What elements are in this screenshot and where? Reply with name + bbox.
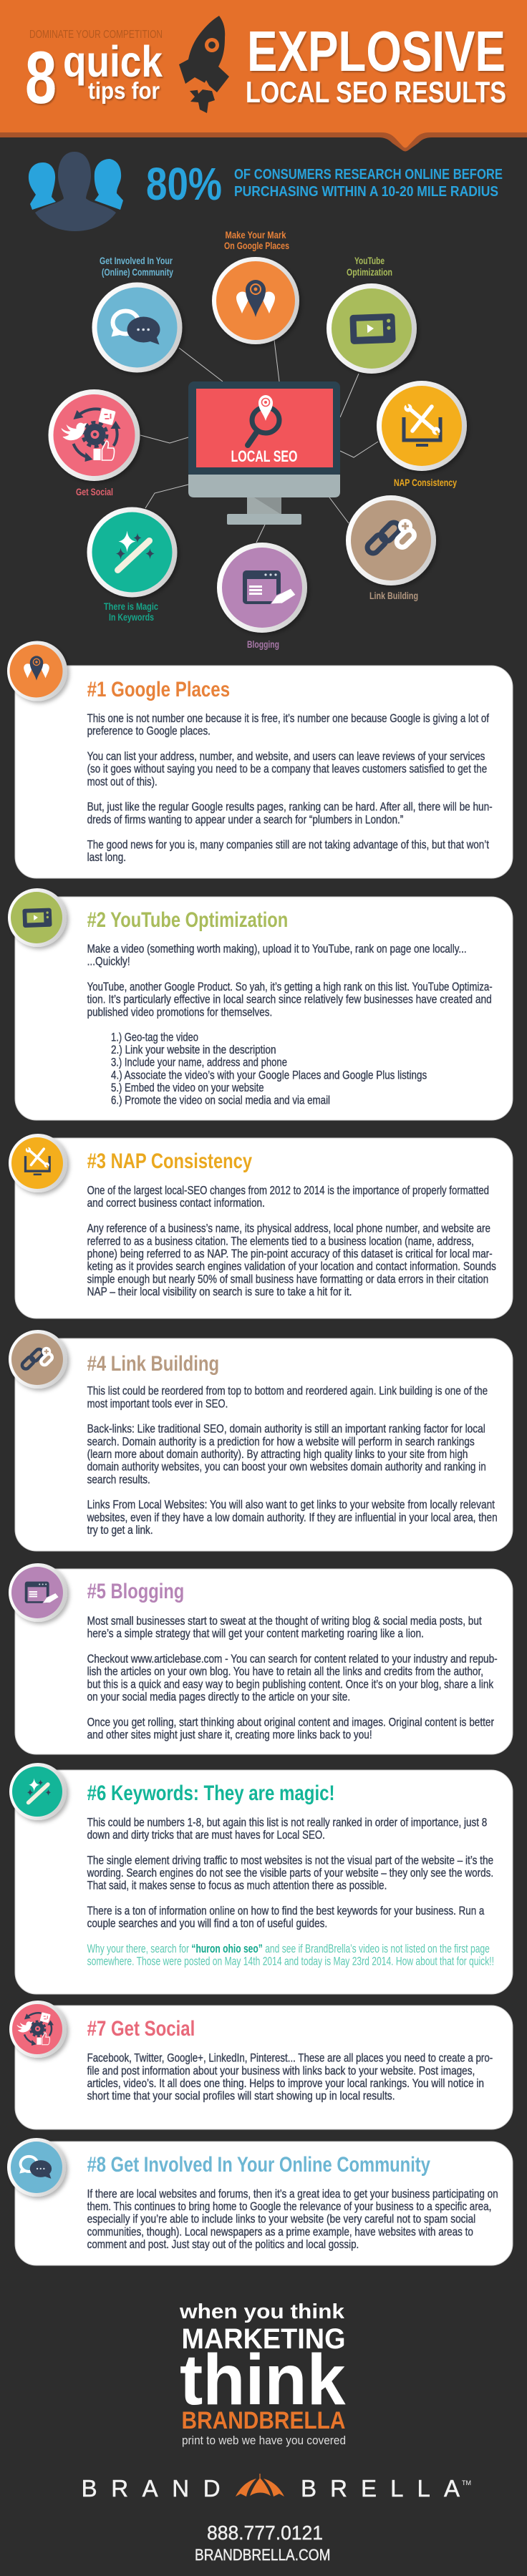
body text xyxy=(87,1385,498,1537)
circle labels: Get Involved In Your xyxy=(100,255,173,266)
body text xyxy=(87,1816,493,1930)
contact details: BRANDBRELLA.COM xyxy=(195,2546,331,2564)
icon: chain badge xyxy=(9,1330,67,1389)
body text xyxy=(87,943,493,1107)
footer slogan: BRANDBRELLA xyxy=(182,2407,345,2434)
icon: blog badge xyxy=(9,1563,67,1622)
footer slogan xyxy=(179,2300,346,2447)
body text: couple searches and you will find a ton of useful guides. xyxy=(87,1918,327,1930)
body text: most important tools ever in SEO. xyxy=(87,1397,228,1410)
panel: #2 YouTube Optimization xyxy=(8,888,513,1120)
header banner xyxy=(0,0,527,152)
headline left xyxy=(25,37,163,120)
circle: blogging xyxy=(217,543,307,633)
panel: #5 Blogging xyxy=(9,1563,513,1754)
callout xyxy=(87,1943,494,1968)
circle labels: YouTube xyxy=(354,255,385,266)
circle: NAP xyxy=(377,381,467,471)
headline left: quick xyxy=(63,37,163,86)
connector lines xyxy=(140,340,378,543)
icon: social badge xyxy=(9,2001,67,2058)
contact details xyxy=(195,2522,331,2564)
circle labels: In Keywords xyxy=(109,611,154,623)
body text: published video promotions for themselves. xyxy=(87,1006,272,1019)
icon: places badge xyxy=(7,641,67,701)
heading: #2 YouTube Optimization xyxy=(87,908,288,932)
footer slogan: MARKETING xyxy=(182,2323,345,2355)
body text xyxy=(87,2187,498,2251)
body text: on your social media pages directly to the article on your site. xyxy=(87,1691,350,1703)
panel: #4 Link Building xyxy=(9,1330,513,1551)
body text: and other sites might just share it, creating more links back to you! xyxy=(87,1729,372,1741)
icon: magnifier pin xyxy=(248,395,279,445)
body text: here’s a simple strategy that will get your content marketing roaring like a lion. xyxy=(87,1628,424,1641)
circle: social xyxy=(49,389,140,481)
body text: 3.) Include your name, address and phone xyxy=(111,1056,287,1069)
footer slogan: when you think xyxy=(179,2300,345,2323)
brand logo: TM xyxy=(462,2479,471,2487)
body text: comment and post. Just stay out of the politics and local gossip. xyxy=(87,2238,359,2251)
brand logo: BRAND xyxy=(82,2475,221,2502)
circle: link building xyxy=(346,495,436,585)
heading: #7 Get Social xyxy=(87,2017,195,2041)
body text: try to get a link. xyxy=(87,1524,153,1537)
body text: and correct business contact information. xyxy=(87,1197,265,1210)
circle labels: Optimization xyxy=(347,266,392,278)
footer slogan: print to web we have you covered xyxy=(182,2434,346,2447)
circle labels: Get Social xyxy=(76,486,113,497)
kicker text: DOMINATE YOUR COMPETITION xyxy=(29,29,163,41)
body text: 4.) Associate the video’s with your Google Places and Google Plus listings xyxy=(111,1069,427,1082)
icon: tools badge xyxy=(9,1134,67,1192)
body text: search results. xyxy=(87,1473,150,1486)
body text: 1.) Geo-tag the video xyxy=(111,1031,198,1044)
contact details: 888.777.0121 xyxy=(207,2522,323,2544)
panel: #3 NAP Consistency xyxy=(9,1134,513,1318)
body text: most out of this). xyxy=(87,775,158,788)
headline left: 8 xyxy=(25,37,57,120)
headline right xyxy=(246,19,506,109)
icon: umbrella xyxy=(236,2474,284,2497)
body text xyxy=(87,1615,498,1741)
body text: 5.) Embed the video on your website xyxy=(111,1082,264,1094)
panel: #8 Get Involved xyxy=(7,2138,513,2265)
icon: people xyxy=(29,152,123,231)
circle labels: Blogging xyxy=(247,638,279,650)
circle labels: (Online) Community xyxy=(102,266,173,278)
icon: video badge xyxy=(8,888,67,947)
body text: preference to Google places. xyxy=(87,725,211,738)
body text: dreds of firms wanting to appear under a search for “plumbers in London.” xyxy=(87,813,403,826)
screen label: LOCAL SEO xyxy=(231,447,298,465)
circle labels: NAP Consistency xyxy=(394,477,457,488)
icon: chat badge xyxy=(7,2138,66,2197)
heading: #1 Google Places xyxy=(87,678,230,701)
heading: #8 Get Involved In Your Online Community xyxy=(87,2153,430,2177)
footer slogan: think xyxy=(180,2340,346,2420)
circle labels xyxy=(76,229,457,650)
body text: last long. xyxy=(87,851,126,864)
panel: #6 Keywords xyxy=(9,1763,513,1994)
statistic: 80 percent: 80% xyxy=(146,158,222,210)
body text xyxy=(87,2052,493,2103)
heading: #4 Link Building xyxy=(87,1352,219,1376)
heading: #3 NAP Consistency xyxy=(87,1150,252,1173)
heading: #6 Keywords: They are magic! xyxy=(87,1782,334,1805)
icon: wand badge xyxy=(9,1763,67,1820)
circle: keywords xyxy=(87,507,178,597)
headline left: tips for xyxy=(88,77,160,104)
body text xyxy=(87,712,493,864)
panel: #1 Google Places xyxy=(7,641,513,878)
brand logo xyxy=(82,2474,471,2502)
heading: #5 Blogging xyxy=(87,1580,184,1603)
circle labels: On Google Places xyxy=(224,240,289,251)
circle labels: Link Building xyxy=(369,590,418,601)
body text: That said, it makes sense to focus as much attention there as possible. xyxy=(87,1880,387,1892)
body text: short time that your social profiles will start showing up in local results. xyxy=(87,2090,395,2103)
body text: 6.) Promote the video on social media and via email xyxy=(111,1094,330,1107)
circle: youtube xyxy=(327,283,417,374)
body text: down and dirty tricks that are must haves for Local SEO. xyxy=(87,1829,325,1842)
body text xyxy=(87,1184,496,1298)
brand logo: BRELLA xyxy=(301,2475,460,2502)
body text: ...Quickly! xyxy=(87,956,130,968)
body text: NAP – their local visibility on search is sure to take a hit for it. xyxy=(87,1285,352,1298)
circle labels: Make Your Mark xyxy=(225,229,286,240)
monitor: local SEO xyxy=(188,381,340,525)
panel: #7 Get Social xyxy=(9,2001,513,2129)
circle: community xyxy=(92,282,182,372)
circle labels: There is Magic xyxy=(104,601,158,612)
statistic: 80 percent xyxy=(146,158,503,210)
circle: google places xyxy=(212,257,299,344)
body text: 2.) Link your website in the description xyxy=(111,1044,276,1056)
icon: rocket xyxy=(179,16,229,113)
